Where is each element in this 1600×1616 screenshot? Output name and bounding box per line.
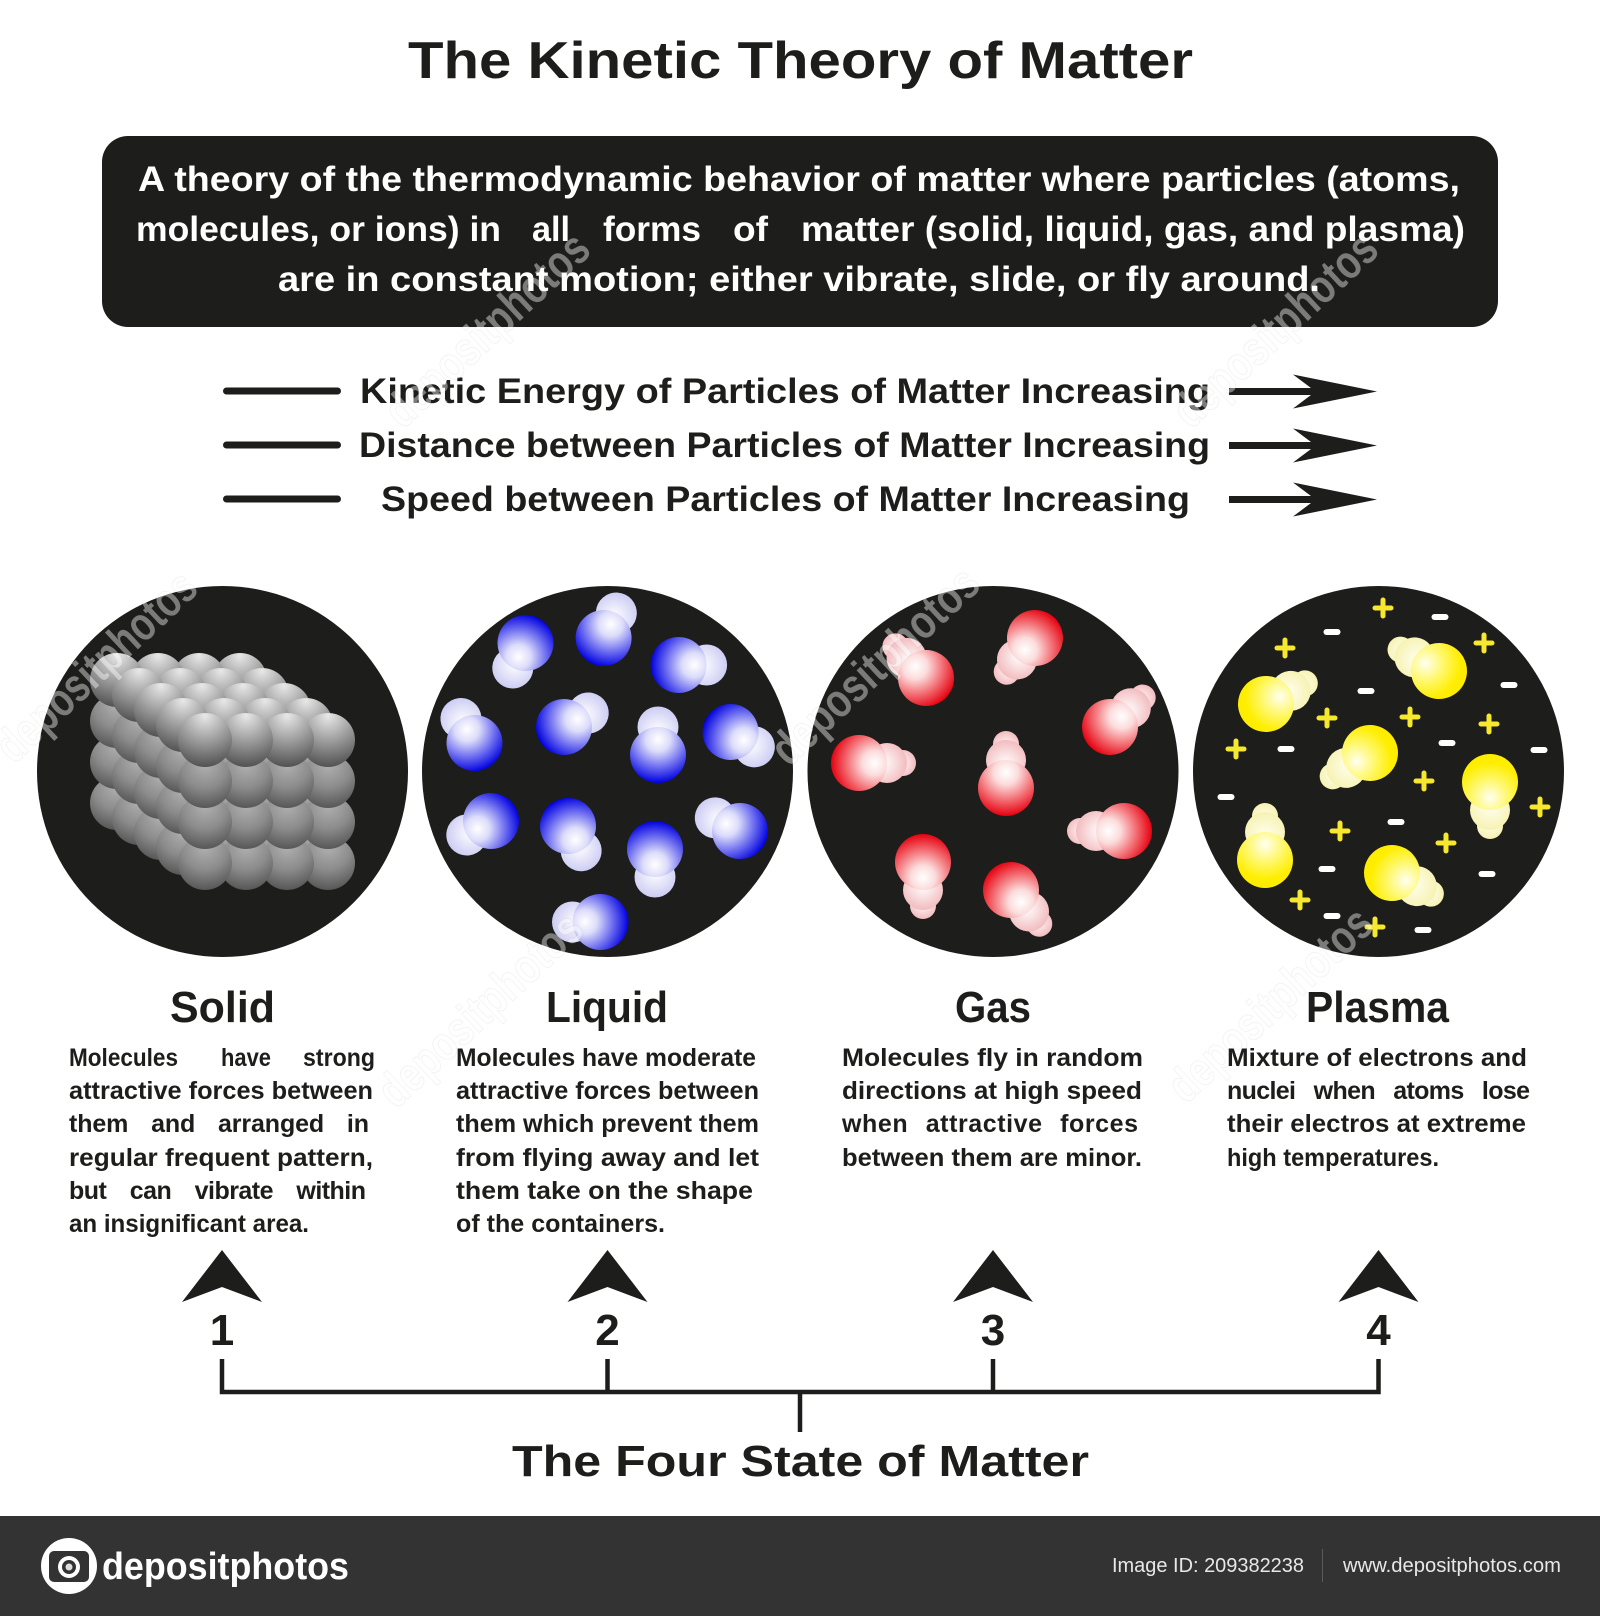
panel: solid particles [37,586,408,957]
text block: solid description: an insignificant area. [69,1210,309,1238]
footer bar: www.depositphotos.com [1342,1555,1561,1577]
number 4: 4 [1366,1306,1391,1355]
text block: plasma description [1227,1044,1530,1172]
panel: plasma particles [1193,586,1564,957]
icon: depositphotos logo [41,1538,97,1594]
text block: liquid description [456,1044,760,1238]
watermarks: depositphotos [367,902,594,1118]
text block: gas description: between them are minor. [842,1144,1142,1172]
arrow: solid up [182,1250,262,1302]
footer bar: Image ID: 209382238 [1112,1555,1304,1577]
text block: solid description [69,1044,375,1238]
text block: gas description: Molecules fly in random [842,1044,1143,1072]
text block: solid description: have [221,1044,271,1072]
arrow: gas up [953,1250,1033,1302]
text block: gas description: when attractive forces [841,1110,1138,1138]
heading: Gas: Gas [955,983,1031,1032]
panel: theory definition: forms [603,210,701,249]
panel: liquid particles [422,582,793,957]
number 2: 2 [595,1306,620,1355]
watermarks: depositphotos [760,557,990,776]
watermarks: depositphotos [1157,897,1384,1113]
watermarks [0,222,1389,1118]
arrow: liquid up [568,1250,648,1302]
text block: solid description: regular frequent pattern, [69,1144,373,1172]
footer bar [0,1516,1600,1616]
text block: liquid description: them which prevent them [456,1110,759,1138]
text block: liquid description: from flying away and let [456,1144,760,1172]
title: The Kinetic Theory of Matter [408,32,1193,90]
text block: liquid description: of the containers. [456,1210,665,1238]
panel: theory definition: are in constant motion; either vibrate, slide, or fly around. [278,260,1320,299]
text block: plasma description: Mixture of electrons and [1227,1044,1527,1072]
text block: solid description: but can vibrate within [69,1177,366,1205]
number 3: 3 [981,1306,1005,1355]
text block: solid description: strong [303,1044,375,1072]
text block: solid description: them and arranged in [69,1110,369,1138]
text block: gas description: directions at high speed [842,1077,1142,1105]
panel: gas particles [808,586,1178,957]
row: kinetic energy increasing [223,372,1377,411]
text block: solid description: Molecules [69,1044,178,1072]
panel: theory definition: of [733,210,768,249]
footer bar: depositphotos [102,1546,349,1588]
text block: plasma description: their electros at extreme [1227,1110,1526,1138]
text block: liquid description: attractive forces between [456,1077,759,1105]
watermarks: depositphotos [374,222,601,438]
heading: Solid: Solid [170,983,275,1032]
panel: theory definition [102,136,1498,327]
number 1: 1 [210,1306,234,1355]
text block: plasma description: high temperatures. [1227,1144,1439,1172]
row: distance increasing: Distance between Particles of Matter Increasing [359,426,1210,465]
text block: plasma description: nuclei when atoms lose [1227,1077,1530,1105]
text block: gas description [841,1044,1143,1172]
panel: theory definition: matter (solid, liquid, gas, and plasma) [801,210,1465,249]
arrow: plasma up [1338,1250,1418,1302]
text block: solid description: attractive forces between [69,1077,373,1105]
text block: liquid description: them take on the shape [456,1177,753,1205]
row: speed increasing: Speed between Particles of Matter Increasing [381,480,1190,519]
caption: the four states: The Four State of Matter [512,1437,1089,1486]
text block: liquid description: Molecules have moderate [456,1044,756,1072]
row: speed increasing [223,480,1377,519]
heading: Plasma: Plasma [1306,983,1449,1032]
row: kinetic energy increasing: Kinetic Energy of Particles of Matter Increasing [360,372,1210,411]
bracket connector [222,1359,1378,1432]
panel: theory definition: molecules, or ions) in [136,210,501,249]
watermarks: depositphotos [1162,222,1389,438]
panel: theory definition: all [532,210,570,249]
panel: theory definition: A theory of the thermodynamic behavior of matter where particles (atoms, [138,160,1460,199]
heading: Liquid: Liquid [546,983,668,1032]
row: distance increasing [223,426,1377,465]
